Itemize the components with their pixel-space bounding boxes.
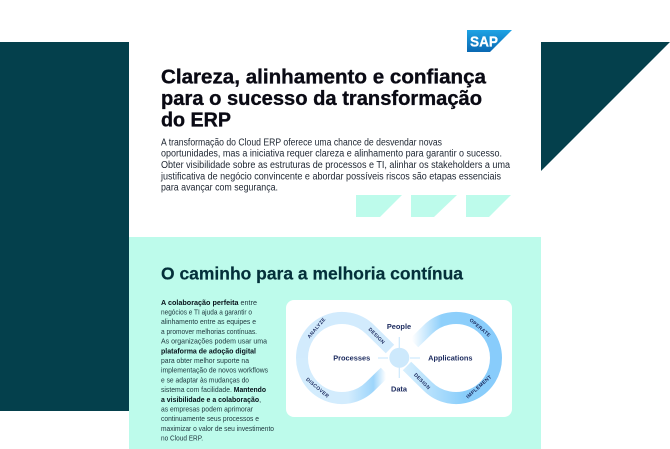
intro paragraph <box>160 137 510 194</box>
body text: continuamente seus processos e <box>161 414 259 423</box>
intro paragraph: Obter visibilidade sobre as estruturas de processos e TI, alinhar os stakeholders a uma <box>161 160 510 171</box>
title <box>161 66 487 132</box>
band labels: DISCOVER <box>304 377 330 400</box>
body text <box>161 298 274 443</box>
band labels: DESIGN <box>367 327 386 346</box>
infinity diagram card <box>286 300 512 417</box>
band labels: IMPLEMENT <box>465 374 493 400</box>
body text: sistema com facilidade. Mantendo <box>161 385 266 394</box>
title: Clareza, alinhamento e confiança <box>161 66 487 88</box>
body text: no Cloud ERP. <box>161 434 203 443</box>
panel: continuous improvement <box>129 237 541 449</box>
body text: implementação de novos workflows <box>161 366 268 375</box>
body text: negócios e TI ajuda a garantir o <box>161 308 252 316</box>
body text: As organizações podem usar uma <box>161 337 268 346</box>
body text: a promover melhorias contínuas. <box>161 327 257 336</box>
SAP logo: SAP <box>470 34 498 50</box>
centre hub and rays <box>378 337 420 378</box>
diagram labels: Processes <box>333 354 370 362</box>
right dark teal triangle <box>541 42 670 171</box>
infinity loop bands <box>302 318 496 398</box>
intro paragraph: A transformação do Cloud ERP oferece uma chance de desvendar novas <box>161 137 442 148</box>
SAP logo <box>467 30 512 52</box>
title: do ERP <box>161 108 231 132</box>
body text: A colaboração perfeita entre <box>161 298 257 307</box>
body text: e se adaptar às mudanças do <box>161 375 249 384</box>
section heading: O caminho para a melhoria contínua <box>161 264 463 284</box>
body text: para obter melhor suporte na <box>161 356 250 365</box>
body text: a visibilidade e a colaboração, <box>161 395 261 404</box>
band labels <box>304 316 493 400</box>
body text: alinhamento entre as equipes e <box>161 317 256 326</box>
body text: maximizar o valor de seu investimento <box>161 424 274 433</box>
band labels: DESIGN <box>412 372 431 391</box>
band labels: OPERATE <box>468 318 492 339</box>
diagram labels: Data <box>391 385 408 394</box>
intro paragraph: justificativa de negócio convincente e abordar possíveis riscos são etapas essenciais <box>160 171 501 182</box>
title: para o sucesso da transformação <box>161 87 482 110</box>
intro paragraph: para avançar com segurança. <box>161 183 278 194</box>
decorative mint chevrons <box>356 195 511 217</box>
diagram labels: Applications <box>428 354 472 362</box>
band labels: ANALYZE <box>307 316 328 340</box>
body text: as empresas podem aprimorar <box>161 404 254 414</box>
left dark teal panel <box>0 42 129 411</box>
diagram labels: People <box>387 322 411 331</box>
body text: plataforma de adoção digital <box>161 346 256 355</box>
intro paragraph: oportunidades, mas a iniciativa requer clareza e alinhamento para garantir o sucesso. <box>161 149 502 160</box>
diagram labels <box>333 322 472 394</box>
